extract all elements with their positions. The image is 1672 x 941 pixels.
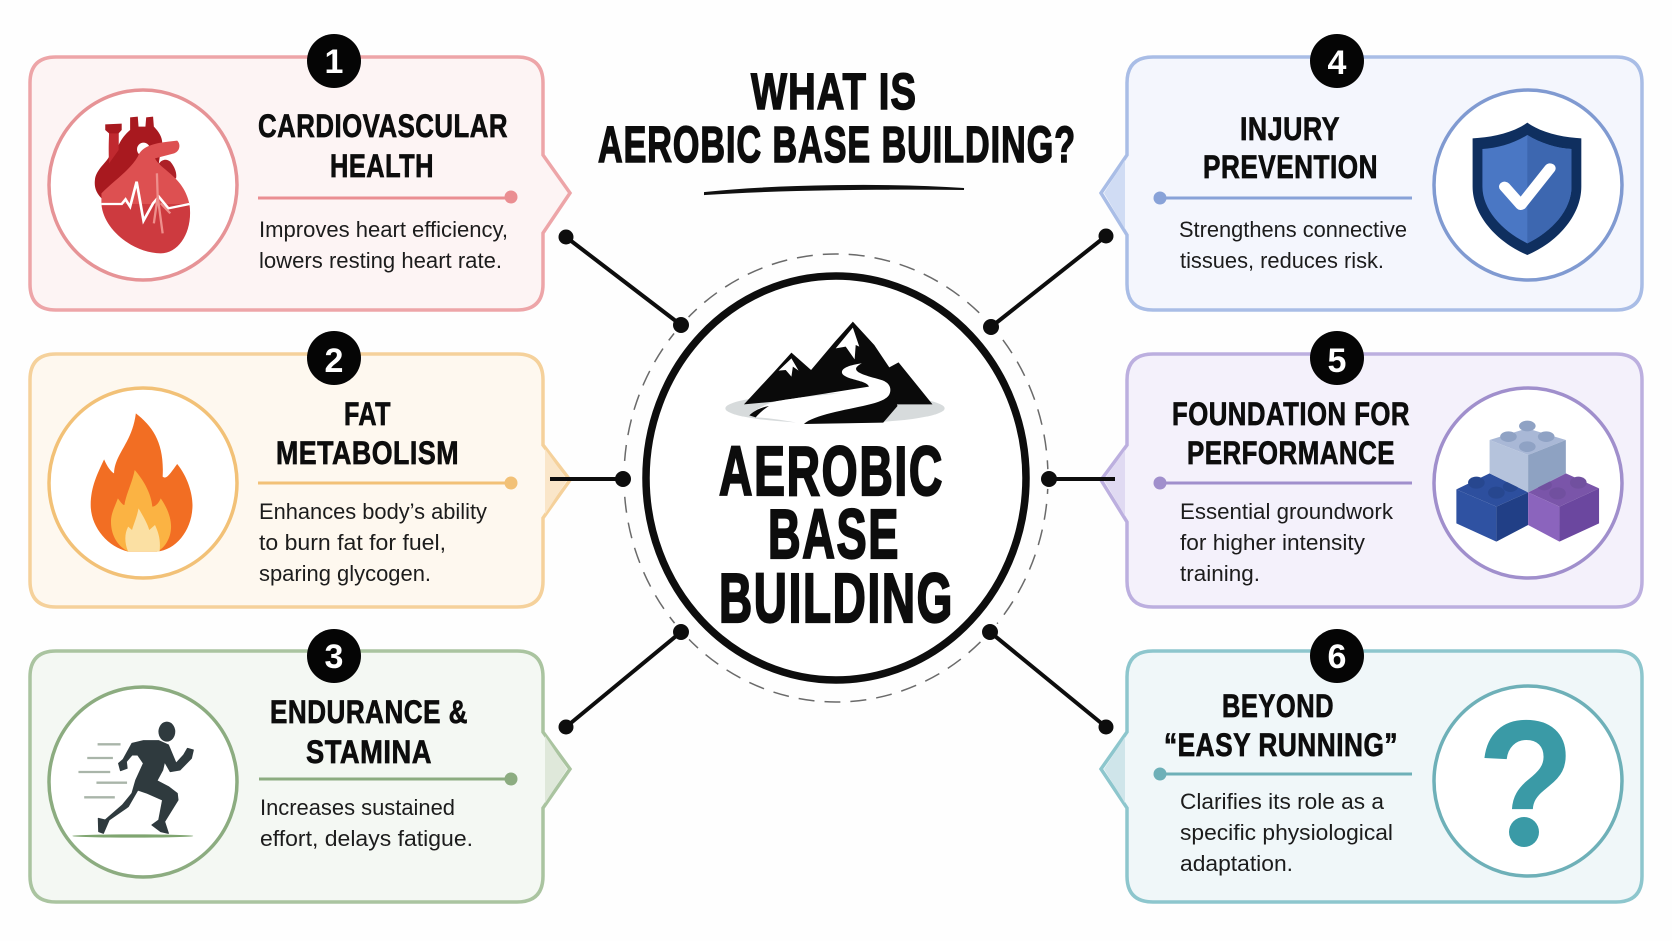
hub label: BASE [768, 495, 900, 573]
text block: tissues, reduces risk. [1180, 248, 1384, 273]
heading [1203, 111, 1378, 185]
divider [1154, 768, 1412, 780]
hub label: AEROBIC [719, 432, 944, 510]
dashed outer ring [613, 254, 1059, 702]
heading: STAMINA [306, 734, 432, 770]
badge 2 [307, 331, 361, 385]
text block: Clarifies its role as a [1180, 789, 1385, 814]
divider [1154, 476, 1412, 490]
badge 3: 3 [325, 638, 343, 676]
connector: panel 5 to hub [1049, 477, 1115, 481]
text block [260, 795, 473, 851]
text block: lowers resting heart rate. [259, 248, 502, 273]
divider [258, 190, 518, 204]
icon: mountain with winding road [725, 322, 945, 424]
text block: Essential groundwork [1180, 499, 1394, 524]
badge 6 [1310, 629, 1364, 683]
badge 5: 5 [1328, 342, 1346, 380]
badge 1: 1 [325, 43, 343, 81]
text block: Improves heart efficiency, [259, 217, 508, 242]
connector: panel 2 to hub [550, 477, 623, 481]
text block: specific physiological [1180, 820, 1393, 845]
text block [1179, 217, 1407, 273]
badge 2: 2 [325, 342, 343, 380]
title: WHAT IS [751, 63, 917, 120]
divider [258, 476, 518, 490]
panel: beyond easy running [1101, 629, 1642, 902]
panel: cardiovascular health [30, 34, 570, 310]
text block: to burn fat for fuel, [259, 530, 446, 555]
panel: injury prevention [1101, 34, 1642, 310]
heading [270, 694, 468, 770]
heading: PREVENTION [1203, 149, 1378, 185]
text block: Strengthens connective [1179, 217, 1407, 242]
icon: flame [49, 388, 237, 578]
connector lines [558, 228, 1114, 734]
heading: METABOLISM [276, 435, 459, 471]
hub label: BUILDING [719, 559, 954, 637]
text block: adaptation. [1180, 851, 1293, 876]
badge 4: 4 [1328, 44, 1347, 82]
divider [1154, 192, 1412, 204]
text block: sparing glycogen. [259, 561, 431, 586]
text block: effort, delays fatigue. [260, 826, 473, 851]
heading [276, 396, 459, 471]
central hub [646, 276, 1026, 680]
text block: training. [1180, 561, 1260, 586]
heading: ENDURANCE & [270, 694, 468, 730]
text block [259, 217, 508, 273]
badge 4 [1310, 34, 1364, 88]
text block [1180, 789, 1393, 876]
badge 1 [307, 34, 361, 88]
heading: FAT [344, 396, 391, 432]
text block: Enhances body’s ability [259, 499, 487, 524]
heading: INJURY [1240, 111, 1340, 147]
heading: BEYOND [1222, 688, 1334, 724]
heading: HEALTH [330, 148, 434, 184]
divider [259, 772, 518, 786]
heading: FOUNDATION FOR [1172, 396, 1410, 432]
icon: heart [49, 90, 237, 280]
text block: Increases sustained [260, 795, 455, 820]
badge 6: 6 [1328, 638, 1346, 676]
icon: shield [1434, 90, 1622, 280]
panel: endurance and stamina [30, 629, 570, 902]
title: AEROBIC BASE BUILDING? [598, 116, 1076, 173]
badge 5 [1310, 331, 1364, 385]
heading: “EASY RUNNING” [1164, 727, 1398, 763]
title [598, 63, 1076, 194]
icon: question mark: ? [1477, 684, 1575, 886]
hub label [719, 432, 954, 637]
text block [1180, 499, 1394, 586]
badge 3 [307, 629, 361, 683]
heading [1164, 688, 1398, 763]
text block: for higher intensity [1180, 530, 1365, 555]
panel: fat metabolism [30, 331, 623, 607]
panel: foundation for performance [1049, 331, 1642, 607]
icon: runner [49, 687, 237, 877]
icon: building blocks [1434, 388, 1622, 578]
heading [1172, 396, 1410, 471]
heading: PERFORMANCE [1187, 435, 1395, 471]
heading [258, 108, 508, 184]
icon: question mark [1434, 684, 1622, 886]
text block [259, 499, 487, 586]
heading: CARDIOVASCULAR [258, 108, 508, 144]
